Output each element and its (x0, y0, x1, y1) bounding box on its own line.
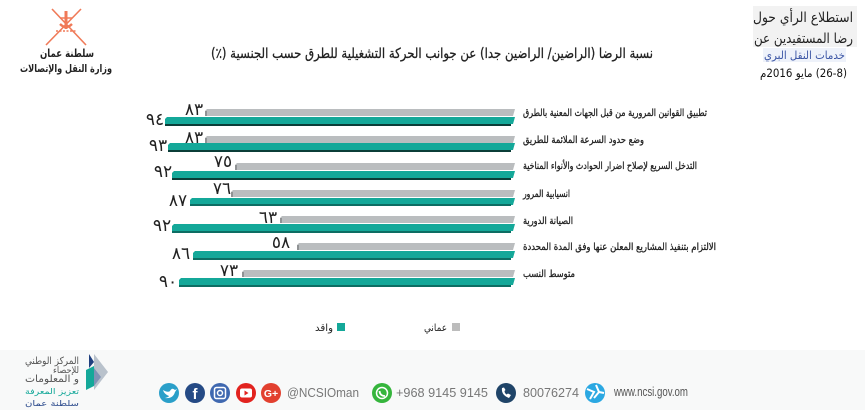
row 4 bars: ٨٧ (169, 191, 187, 211)
panel: survey heading: خدمات النقل البري (764, 49, 845, 62)
logo: Oman ministry emblem and name: وزارة النقل والإتصالات (20, 63, 112, 75)
row 2 bars: ٨٣ (185, 128, 203, 148)
panel: survey heading: استطلاع الرأي حول (753, 8, 853, 26)
row 4 bars (169, 179, 515, 211)
legend (315, 323, 460, 334)
row 6 bars: ٨٦ (172, 244, 190, 264)
icon: google plus: G+ (264, 388, 278, 400)
icon: globe (585, 383, 605, 403)
row 7 bars (159, 261, 515, 292)
category labels: وضع حدود السرعة الملائمة للطريق (523, 135, 644, 146)
row 6 bars: ٥٨ (272, 233, 290, 253)
row 4 bars: ٧٦ (213, 179, 231, 199)
icon: facebook: f (192, 386, 198, 403)
row 7 bars: ٩٠ (159, 272, 177, 292)
bar chart: satisfaction by nationality (146, 100, 515, 292)
category labels: تطبيق القوانين المرورية من قبل الجهات المعنية بالطرق (523, 108, 707, 119)
row 1 bars: ٩٤ (146, 110, 164, 130)
logo: NCSI: المركز الوطني (25, 356, 79, 367)
category labels: الصيانة الدورية (523, 216, 573, 227)
legend: عماني (424, 323, 447, 334)
category labels (522, 108, 716, 280)
whatsapp number: +968 9145 9145 (396, 385, 488, 400)
icon: facebook (185, 383, 205, 403)
category labels: انسيابية المرور (522, 189, 570, 200)
row 5 bars (153, 208, 515, 236)
phone number: 80076274 (523, 385, 579, 400)
category labels: الالتزام بتنفيذ المشاريع المعلن عنها وفق المدة المحددة (523, 242, 716, 253)
row 5 bars: ٦٣ (259, 208, 277, 228)
row 3 bars: ٧٥ (214, 152, 232, 172)
row 6 bars (172, 233, 515, 264)
logo: NCSI (25, 354, 108, 408)
website: www.ncsi.gov.om (613, 384, 688, 399)
row 2 bars (149, 128, 515, 156)
row 1 bars (146, 100, 515, 130)
panel: footer (0, 350, 865, 410)
panel: survey heading (753, 6, 857, 81)
logo: NCSI: للإحصاء (53, 366, 79, 376)
logo: Oman ministry emblem and name: سلطنة عمان (40, 47, 94, 60)
panel: survey heading: (26-8) مايو 2016م (760, 66, 847, 81)
icon: youtube (236, 383, 256, 403)
logo: NCSI: سلطنة عمان (25, 399, 79, 408)
icon: twitter (159, 383, 179, 403)
icon: whatsapp (372, 383, 392, 403)
icon: instagram (210, 383, 230, 403)
category labels: متوسط النسب (523, 269, 575, 280)
title: نسبة الرضا (الراضين/ الراضين جدا) عن جوانب الحركة التشغيلية للطرق حسب الجنسية (٪) (211, 46, 653, 62)
category labels: التدخل السريع لإصلاح اضرار الحوادث والأنواء المناخية (523, 159, 697, 172)
logo: NCSI: تعزيز المعرفة (25, 387, 79, 396)
row 3 bars: ٩٢ (154, 162, 172, 182)
icon: phone (496, 383, 516, 403)
logo: Oman ministry emblem and name (20, 9, 112, 75)
legend: واقد (315, 323, 333, 334)
logo: NCSI: و المعلومات (25, 374, 79, 385)
social handle: @NCSIOman (287, 385, 359, 400)
row 1 bars: ٨٣ (185, 100, 203, 120)
row 2 bars: ٩٣ (149, 136, 167, 156)
row 7 bars: ٧٣ (220, 261, 238, 281)
row 5 bars: ٩٢ (153, 216, 171, 236)
icon: google plus (261, 383, 281, 403)
row 3 bars (154, 152, 515, 182)
